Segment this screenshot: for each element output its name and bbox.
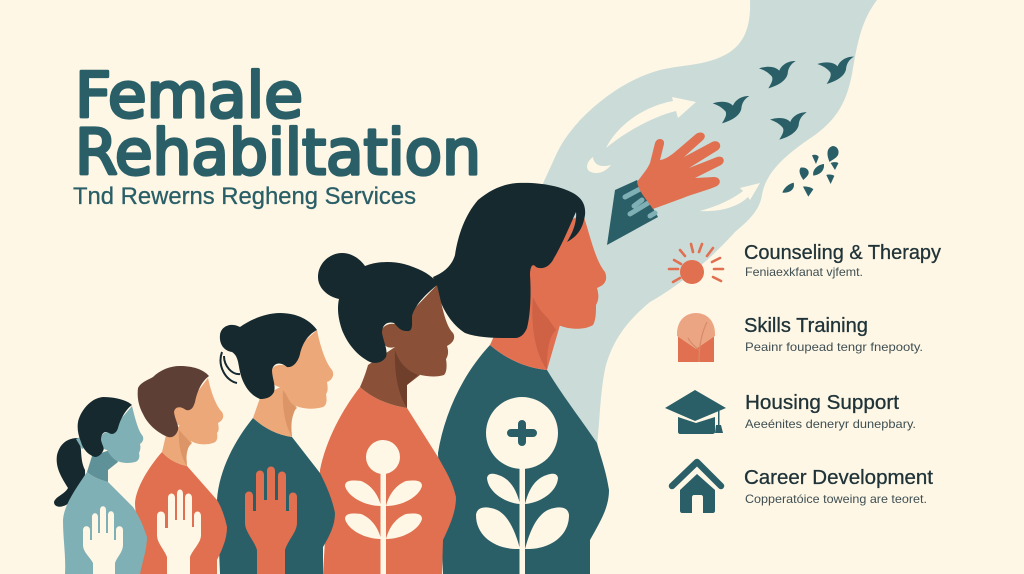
description: Copperatóice toweing are teoret. <box>745 492 927 506</box>
stem <box>380 472 386 574</box>
title <box>75 59 481 189</box>
woman 5: largest figure <box>433 183 609 574</box>
neck shadow <box>532 297 556 370</box>
hand on shirt <box>157 490 201 574</box>
icon: sun <box>669 244 723 284</box>
face <box>513 214 606 329</box>
hair <box>433 183 585 338</box>
hair band <box>76 437 86 449</box>
heading: Career Development <box>744 467 933 489</box>
plus <box>511 424 533 442</box>
service: career development <box>672 462 933 513</box>
description: Aeeénites deneryr dunepbary. <box>745 417 916 431</box>
title: Female <box>75 59 303 132</box>
plant emblem <box>476 397 569 574</box>
face <box>271 330 333 409</box>
service: counseling and therapy <box>669 242 941 284</box>
description: Feniaexkfanat vjfemt. <box>745 265 863 279</box>
bird <box>759 61 796 88</box>
flower <box>486 397 558 469</box>
bird <box>817 57 854 84</box>
woman 3 <box>217 313 335 574</box>
neck <box>253 385 297 437</box>
flowing ribbon background <box>540 0 877 445</box>
neck <box>360 347 420 408</box>
icon: graduation cap <box>665 390 726 434</box>
shirt <box>135 452 227 574</box>
shirt <box>438 345 609 574</box>
hand on shirt <box>245 466 297 574</box>
neck <box>162 425 192 466</box>
face <box>381 285 454 376</box>
title: Rehabiltation <box>75 116 481 189</box>
shirt <box>217 418 335 574</box>
cream arrows in ribbon <box>587 97 760 211</box>
description: Peainr foupead tengr fnepooty. <box>745 340 923 354</box>
heading: Skills Training <box>744 315 868 337</box>
hand on shirt <box>83 506 123 574</box>
flower <box>366 440 400 474</box>
service: housing support <box>665 390 916 434</box>
bird <box>770 112 807 140</box>
sleeve highlights <box>625 189 655 216</box>
woman 4 <box>318 253 456 574</box>
bird <box>713 96 749 123</box>
icon: leaf shield <box>677 313 715 362</box>
ponytail <box>54 438 85 507</box>
scattered leaves <box>782 146 839 197</box>
icon: house <box>672 462 721 513</box>
neck shadow <box>283 390 296 437</box>
hair <box>318 253 437 363</box>
hair curl <box>221 352 240 383</box>
subtitle: Tnd Rewerns Regheng Services <box>73 183 416 210</box>
shirt <box>320 387 456 574</box>
neck shadow <box>179 430 191 466</box>
woman 1: smallest figure <box>54 397 147 574</box>
shirt <box>63 472 147 574</box>
neck <box>490 295 560 370</box>
icon: reaching hand <box>607 133 724 245</box>
neck shadow <box>395 350 418 408</box>
woman 2 <box>135 366 227 574</box>
stem and leaves <box>476 465 569 574</box>
birds <box>713 57 854 140</box>
plant emblem <box>345 440 422 574</box>
neck <box>87 450 118 482</box>
service: skills training <box>677 313 923 362</box>
hair <box>78 397 132 457</box>
face <box>101 406 143 463</box>
hand <box>637 133 724 209</box>
leaves <box>345 481 381 506</box>
hair <box>220 313 317 399</box>
sleeve <box>607 180 658 245</box>
heading: Counseling & Therapy <box>744 242 941 264</box>
hair <box>138 366 209 437</box>
face <box>173 378 223 444</box>
heading: Housing Support <box>745 392 899 414</box>
